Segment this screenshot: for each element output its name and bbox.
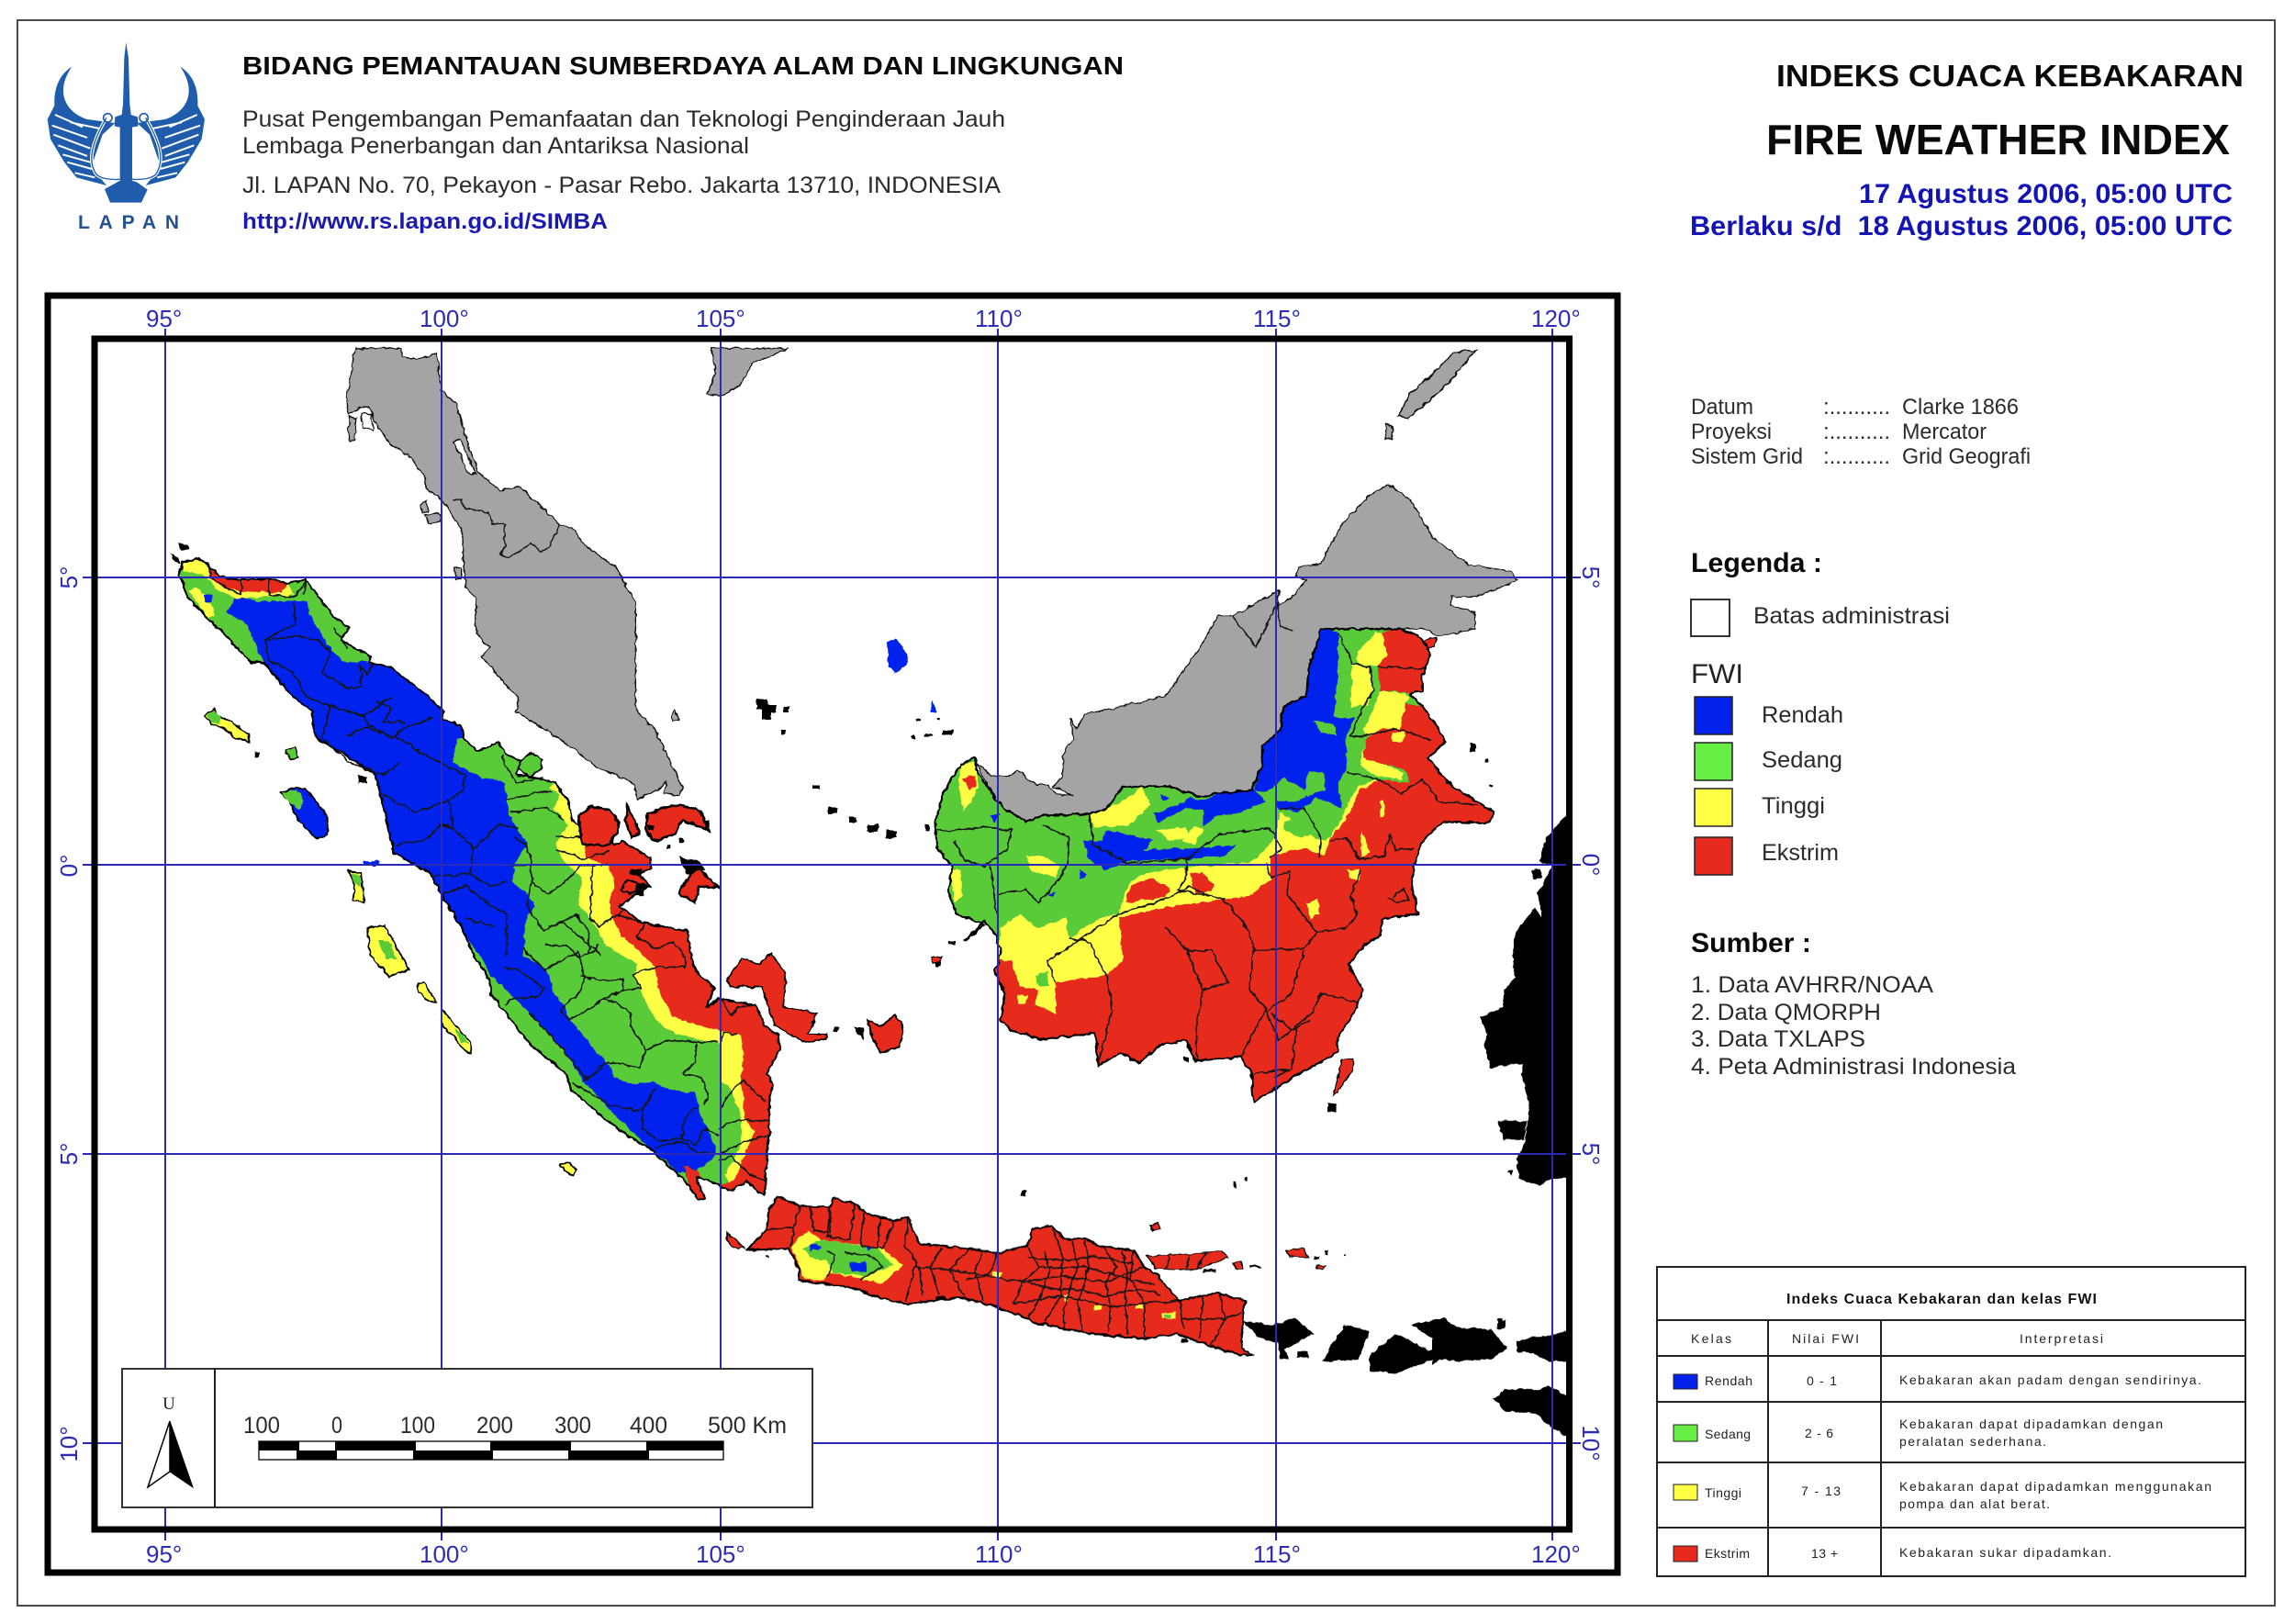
row: sedang: Kebakaran dapat dipadamkan dengan: [1899, 1417, 2163, 1431]
longitude labels top: [146, 305, 1581, 332]
row: tinggi: [1674, 1479, 2211, 1511]
row: rendah: Kebakaran akan padam dengan sendirinya.: [1899, 1372, 2201, 1387]
Sumatra: administrative boundaries south: [505, 924, 769, 1182]
longitude labels bottom: [146, 1540, 1581, 1568]
scale bar labels: [243, 1413, 787, 1439]
legend: rendah: Rendah: [1762, 702, 1843, 728]
legend: ekstrim: [1695, 837, 1839, 875]
legend: rendah: [1695, 697, 1843, 734]
Kalimantan: administrative boundaries: [937, 633, 1477, 1077]
table header: Nilai FWI: [1792, 1331, 1859, 1346]
text: agency name: Lembaga Penerbangan dan Antariksa Nasional: [242, 133, 749, 159]
row: tinggi: 7 - 13: [1801, 1484, 1841, 1498]
longitude labels bottom: 115°: [1253, 1540, 1301, 1568]
latitude labels right: [1577, 566, 1605, 1462]
map metadata: Clarke 1866: [1902, 395, 2019, 420]
row: ekstrim: Ekstrim: [1705, 1546, 1750, 1561]
date: valid until: Berlaku s/d 18 Agustus 2006, 05:00 UTC: [1690, 211, 2233, 241]
Sumatra: administrative boundaries north: [209, 566, 642, 955]
islands near Kalimantan: [1334, 1058, 1353, 1095]
row: tinggi: Kebakaran dapat dipadamkan menggunakan: [1899, 1479, 2211, 1494]
longitude labels top: 110°: [975, 305, 1023, 332]
row: tinggi: pompa dan alat berat.: [1899, 1496, 2050, 1511]
title: Indonesian: INDEKS CUACA KEBAKARAN: [1776, 59, 2244, 93]
latitude labels right: 10°: [1577, 1425, 1605, 1462]
legend: administrative boundary: Batas administrasi: [1753, 603, 1950, 629]
row: ekstrim: [1674, 1545, 2111, 1562]
land: Java: [727, 1177, 1506, 1374]
Kalimantan: low zone: [1254, 625, 1355, 812]
latitude labels left: 5°: [55, 1143, 83, 1165]
map metadata: Datum: [1691, 395, 1753, 420]
table header: Interpretasi: [2020, 1331, 2103, 1346]
row: rendah: Rendah: [1705, 1373, 1752, 1388]
longitude labels top: 95°: [146, 305, 182, 332]
latitude labels left: [55, 566, 83, 1462]
icon: north arrow: [148, 1394, 193, 1487]
row: sedang: Sedang: [1705, 1427, 1751, 1441]
longitude labels top: 105°: [696, 305, 745, 332]
land: Malay Peninsula: [347, 348, 789, 800]
longitude labels bottom: 110°: [975, 1540, 1023, 1568]
longitude labels bottom: 100°: [420, 1540, 469, 1568]
scale and north panel: [122, 1368, 812, 1507]
scale bar labels: 100: [400, 1413, 435, 1439]
legend heading: Legenda :: [1691, 548, 1822, 578]
map metadata: Grid Geografi: [1902, 444, 2031, 469]
table: FWI classes: [1657, 1267, 2245, 1576]
scale bar labels: 300: [554, 1413, 591, 1439]
row: rendah: 0 - 1: [1807, 1373, 1837, 1388]
map metadata: :..........: [1823, 420, 1890, 444]
Kalimantan: high zone: [999, 779, 1410, 1015]
sources list: [1691, 972, 2016, 1080]
icon: LAPAN logo: LAPAN: [78, 212, 179, 233]
scale bar labels: 100: [243, 1413, 280, 1439]
table title: Indeks Cuaca Kebakaran dan kelas FWI: [1786, 1292, 2097, 1307]
Sumatra: extreme zone: [584, 842, 780, 1193]
Kalimantan: pockets: [1306, 899, 1319, 919]
Sumatra: Aceh: [183, 558, 294, 599]
Java: western zones: [791, 1230, 902, 1283]
text: centre name: Pusat Pengembangan Pemanfaatan dan Teknologi Penginderaan Jauh: [242, 106, 1005, 132]
legend: tinggi: Tinggi: [1762, 793, 1825, 819]
legend: ekstrim: Ekstrim: [1762, 840, 1839, 866]
longitude labels top: 120°: [1531, 305, 1581, 332]
text: url: http://www.rs.lapan.go.id/SIMBA: [242, 209, 608, 234]
Sumbawa: [1370, 1319, 1500, 1374]
small islands of the South China Sea: [756, 700, 941, 967]
row: sedang: peralatan sederhana.: [1899, 1434, 2046, 1449]
row: sedang: 2 - 6: [1805, 1426, 1833, 1440]
Kalimantan: extreme zone: [992, 703, 1503, 1110]
map metadata: Proyeksi: [1691, 420, 1772, 444]
latitude labels right: 5°: [1577, 1143, 1605, 1165]
sources list: 4. Peta Administrasi Indonesia: [1691, 1054, 2016, 1080]
Bali: [1242, 1317, 1314, 1361]
Java: administrative boundaries: [767, 1204, 1242, 1345]
row: ekstrim: 13 +: [1811, 1546, 1838, 1561]
row: ekstrim: Kebakaran sukar dipadamkan.: [1899, 1545, 2111, 1560]
sources list: 1. Data AVHRR/NOAA: [1691, 972, 1933, 998]
latitude labels right: 0°: [1577, 854, 1605, 876]
heading: institution: BIDANG PEMANTAUAN SUMBERDAYA ALAM DAN LINGKUNGAN: [242, 51, 1124, 80]
longitude labels bottom: 105°: [696, 1540, 745, 1568]
Sumatra: high zone: [548, 781, 755, 1193]
title: English: FIRE WEATHER INDEX: [1766, 116, 2230, 163]
legend: sedang: [1695, 743, 1842, 780]
land: Palawan: [1398, 350, 1476, 419]
icon: LAPAN logo: [48, 42, 205, 233]
table header: [1691, 1331, 2103, 1346]
longitude labels bottom: 120°: [1531, 1540, 1581, 1568]
latitude labels left: 10°: [55, 1426, 83, 1462]
land: Sumatra: [171, 543, 903, 1204]
map metadata: Mercator: [1902, 420, 1987, 444]
sources list: 3. Data TXLAPS: [1691, 1026, 1865, 1052]
map metadata: [1691, 395, 2031, 469]
land: Kalimantan: [912, 625, 1503, 1112]
latitude labels left: 5°: [55, 566, 83, 588]
legend FWI heading: FWI: [1691, 659, 1743, 689]
row: sedang: [1674, 1417, 2163, 1449]
land: Sulawesi, Flores and Timor: [1432, 813, 1568, 1438]
scale bar labels: 200: [476, 1413, 513, 1439]
sources heading: Sumber :: [1691, 928, 1811, 958]
scale bar labels: 0: [331, 1413, 342, 1439]
sources: [1691, 928, 2016, 1080]
scale bar labels: 400: [630, 1413, 667, 1439]
legend: sedang: Sedang: [1762, 747, 1842, 773]
row: tinggi: Tinggi: [1705, 1485, 1741, 1500]
map: fire weather index: [48, 296, 1618, 1573]
legend: [1691, 548, 1950, 875]
Lombok: [1323, 1325, 1370, 1361]
map metadata: :..........: [1823, 444, 1890, 469]
longitude labels top: 100°: [420, 305, 469, 332]
Bangka, Belitung, Riau islands: [727, 953, 826, 1042]
longitude labels bottom: 95°: [146, 1540, 182, 1568]
Sumatra: low zone: [226, 597, 716, 1172]
scale bar: [259, 1441, 723, 1460]
text: address: Jl. LAPAN No. 70, Pekayon - Pasar Rebo. Jakarta 13710, INDONESIA: [242, 173, 1001, 198]
west coast islands: [206, 709, 249, 742]
legend: administrative boundary: [1691, 599, 1950, 636]
table header: Kelas: [1691, 1331, 1731, 1346]
legend: tinggi: [1695, 789, 1825, 826]
map metadata: :..........: [1823, 395, 1890, 420]
longitude labels top: 115°: [1253, 305, 1301, 332]
latitude labels right: 5°: [1577, 566, 1605, 588]
scale bar labels: 500 Km: [708, 1413, 787, 1439]
icon: north arrow: U: [162, 1394, 175, 1414]
Natuna island: [887, 638, 909, 673]
map frames: [48, 296, 1618, 1573]
latitude labels left: 0°: [55, 855, 83, 877]
sources list: 2. Data QMORPH: [1691, 1000, 1881, 1025]
inner map frame: [95, 339, 1570, 1529]
land: northern Borneo: [976, 485, 1517, 821]
map graticule: [83, 329, 1581, 1540]
row: rendah: [1674, 1372, 2201, 1389]
date: issue: 17 Agustus 2006, 05:00 UTC: [1859, 179, 2233, 209]
map metadata: Sistem Grid: [1691, 444, 1803, 469]
